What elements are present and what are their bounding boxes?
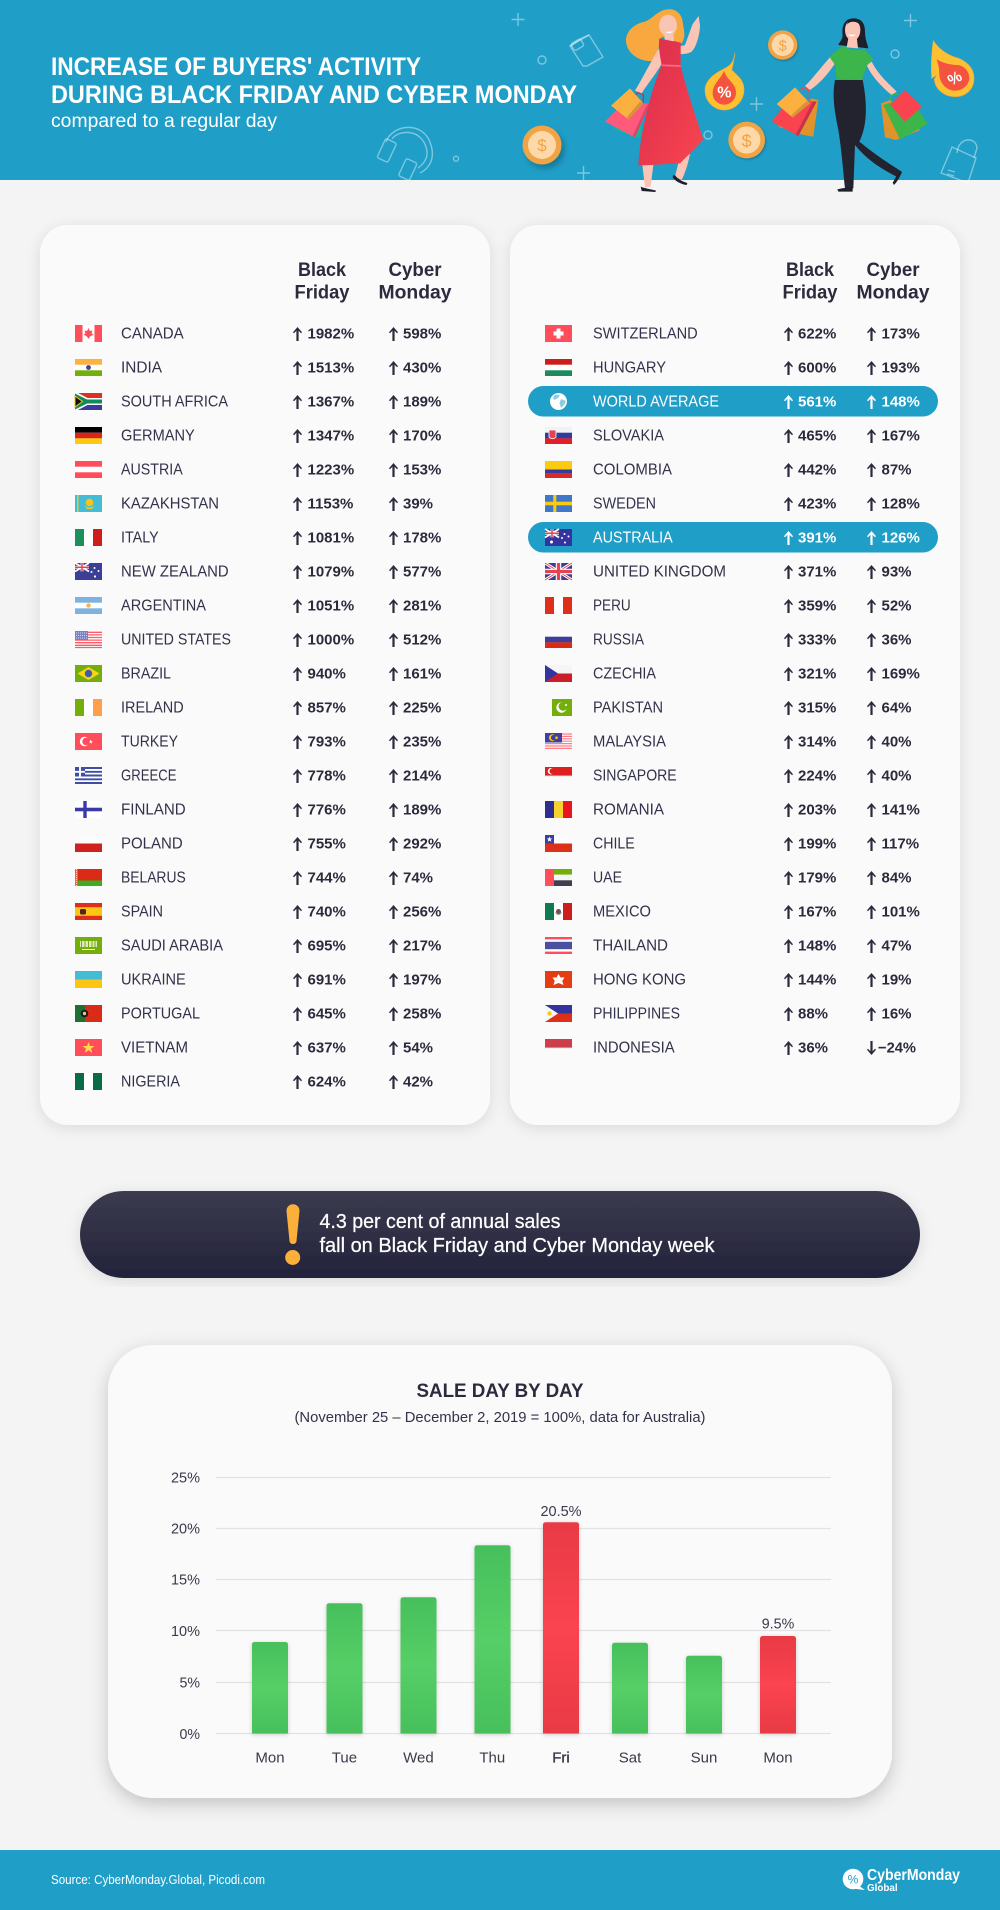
column heading: Black Friday: Friday — [782, 282, 838, 304]
source note: Source: CyberMonday.Global, Picodi.com — [51, 1873, 265, 1887]
flag: Thailand — [545, 937, 572, 954]
flag: Argentina — [75, 597, 102, 614]
row: Austria: AUSTRIA — [121, 462, 183, 478]
row: Canada: 598% — [403, 326, 441, 342]
flag: Germany — [75, 427, 102, 444]
icon: globe — [550, 393, 567, 410]
x axis labels: Wed — [403, 1750, 434, 1766]
flag: Ukraine — [75, 971, 102, 988]
y axis labels: 25% — [171, 1470, 200, 1486]
column heading: Black Friday: Friday — [294, 282, 350, 304]
row: Saudi Arabia: 695% — [308, 938, 346, 954]
row: Australia highlighted: 126% — [882, 530, 920, 546]
flag: Saudi Arabia — [75, 937, 102, 954]
callout text: 4.3 per cent of annual sales — [320, 1211, 560, 1233]
row: Peru: 359% — [798, 598, 836, 614]
column heading: Cyber Monday: Monday — [378, 282, 452, 304]
flag: Finland — [75, 801, 102, 818]
row: Finland — [75, 801, 441, 818]
row: Brazil: 161% — [403, 666, 441, 682]
column heading: Cyber Monday: Cyber — [866, 260, 920, 281]
logo: CyberMonday Global: % — [848, 1872, 859, 1886]
row: South Africa: 189% — [403, 394, 441, 410]
x axis labels: Mon — [763, 1750, 793, 1766]
row: Czechia: 169% — [882, 666, 920, 682]
row: Slovakia: SLOVAKIA — [593, 428, 664, 444]
row: Poland: 292% — [403, 836, 441, 852]
flag: Chile — [545, 835, 572, 852]
icon: coin bottom — [728, 122, 765, 158]
flag: Spain — [75, 903, 102, 920]
row: Turkey — [75, 733, 441, 750]
row: Argentina: ARGENTINA — [121, 598, 206, 614]
flag: Switzerland — [545, 325, 572, 342]
row: Romania: 203% — [798, 802, 836, 818]
row: Italy: 178% — [403, 530, 441, 546]
row: Sweden: 128% — [882, 496, 920, 512]
row: Russia — [545, 631, 912, 648]
flag: Peru — [545, 597, 572, 614]
row: Canada: CANADA — [121, 326, 184, 342]
bar chart — [171, 1470, 831, 1766]
row: Belarus: 74% — [403, 870, 433, 886]
flag: Singapore — [545, 767, 572, 776]
column heading: Black Friday: Black — [786, 260, 834, 281]
flag: Austria — [75, 461, 102, 478]
value labels — [540, 1503, 794, 1632]
row: Spain: 256% — [403, 904, 441, 920]
row: Philippines — [545, 1005, 912, 1022]
callout text: fall on Black Friday and Cyber Monday week — [320, 1235, 715, 1257]
row: Spain: SPAIN — [121, 904, 163, 920]
row: Belarus — [75, 869, 433, 886]
row: United States: 512% — [403, 632, 441, 648]
row: Finland: FINLAND — [121, 802, 186, 818]
row: Peru: 52% — [882, 598, 912, 614]
chart title: SALE DAY BY DAY — [416, 1381, 584, 1402]
row: India: 430% — [403, 360, 441, 376]
row: Nigeria — [75, 1073, 433, 1090]
row: Czechia — [545, 665, 920, 682]
row: Colombia: 87% — [882, 462, 912, 478]
row: Kazakhstan: KAZAKHSTAN — [121, 496, 219, 512]
row: United States: UNITED STATES — [121, 632, 231, 648]
row: Belarus: 744% — [308, 870, 346, 886]
woman in green top — [772, 18, 928, 192]
icon: shopping bag outline — [941, 140, 977, 183]
row: UAE: UAE — [593, 870, 622, 886]
row: India: INDIA — [121, 360, 162, 376]
flag: Colombia — [545, 461, 572, 478]
row: Australia highlighted: 391% — [798, 530, 836, 546]
icon: headphones — [377, 127, 432, 181]
row: Romania: 141% — [882, 802, 920, 818]
icon: coin bottom: $ — [742, 131, 752, 151]
row: Hong Kong — [545, 971, 912, 988]
x axis labels: Mon — [255, 1750, 285, 1766]
row: Saudi Arabia — [75, 937, 441, 954]
flag: UAE — [545, 869, 572, 886]
row: Thailand: THAILAND — [593, 938, 668, 954]
flag: India — [75, 359, 102, 376]
header band — [0, 0, 1000, 180]
row: Portugal: PORTUGAL — [121, 1006, 200, 1022]
y axis labels: 5% — [180, 1674, 200, 1692]
row: Australia highlighted — [528, 522, 938, 552]
row: United Kingdom: UNITED KINGDOM — [593, 564, 726, 580]
y axis labels: 10% — [171, 1623, 200, 1640]
x axis labels — [255, 1750, 793, 1766]
row: Chile: CHILE — [593, 836, 635, 852]
row: Argentina: 1051% — [308, 598, 354, 614]
heading — [51, 53, 577, 132]
x axis labels: Thu — [479, 1750, 505, 1766]
row: Colombia: 442% — [798, 462, 836, 478]
column heading: Black Friday — [782, 260, 838, 304]
row: Colombia: COLOMBIA — [593, 462, 672, 478]
row: Mexico: 167% — [798, 904, 836, 920]
row: Spain: 740% — [308, 904, 346, 920]
row: Chile: 199% — [798, 836, 836, 852]
row: Kazakhstan: 1153% — [308, 496, 353, 512]
row: New Zealand — [75, 563, 441, 580]
row: Hong Kong: 144% — [798, 972, 836, 988]
row: Peru — [545, 597, 912, 614]
row: Ukraine — [75, 971, 441, 988]
row: World average highlighted — [528, 386, 938, 416]
row: India: 1513% — [308, 360, 354, 376]
row: Colombia — [545, 461, 912, 478]
row: Switzerland — [545, 325, 920, 342]
column heading: Cyber Monday: Cyber — [388, 260, 442, 281]
row: Czechia: 321% — [798, 666, 836, 682]
row: Hungary: 600% — [798, 360, 836, 376]
row: Spain — [75, 903, 441, 920]
row: Peru: PERU — [593, 598, 631, 614]
flag: Ireland — [75, 699, 102, 716]
flame badge percent — [705, 53, 744, 110]
flame badge percent: % — [717, 85, 731, 102]
row: Switzerland: SWITZERLAND — [593, 326, 698, 342]
row: New Zealand: 577% — [403, 564, 441, 580]
row: Philippines: 16% — [882, 1006, 912, 1022]
y axis labels: 0% — [180, 1726, 200, 1743]
row: Germany: GERMANY — [121, 428, 195, 444]
row: UAE: 84% — [882, 870, 912, 886]
row: World average highlighted: 561% — [798, 394, 836, 410]
row: Singapore: SINGAPORE — [593, 768, 677, 784]
panel: right ranking — [510, 225, 960, 1125]
column heading: Cyber Monday — [856, 260, 930, 304]
decorative line icons — [377, 13, 977, 183]
value labels: 20.5% — [540, 1503, 582, 1520]
row: Portugal: 258% — [403, 1006, 441, 1022]
row: Poland: POLAND — [121, 836, 183, 852]
row: Austria: 153% — [403, 462, 441, 478]
row: Finland: 776% — [308, 802, 346, 818]
heading: DURING BLACK FRIDAY AND CYBER MONDAY — [51, 81, 577, 109]
row: Ukraine: 691% — [308, 972, 346, 988]
row: Argentina — [75, 597, 441, 614]
row: Sweden: 423% — [798, 496, 836, 512]
panel: left ranking — [40, 225, 490, 1125]
row: Hong Kong: HONG KONG — [593, 972, 686, 988]
flag: Sweden — [545, 495, 572, 512]
flag: Canada — [75, 325, 102, 342]
row: Indonesia: −24% — [878, 1040, 916, 1056]
x axis labels: Sun — [691, 1750, 717, 1766]
flag: Indonesia — [545, 1039, 572, 1048]
flag: Romania — [545, 801, 572, 818]
footer band — [0, 1850, 1000, 1910]
column heading: Cyber Monday: Monday — [856, 282, 930, 304]
row: Singapore — [545, 767, 912, 784]
flag: Malaysia — [545, 733, 572, 749]
row: Poland — [75, 835, 441, 852]
flame badge right: % — [945, 68, 966, 89]
row: Slovakia: 465% — [798, 428, 836, 444]
row: Indonesia: 36% — [798, 1040, 828, 1056]
row: Ireland — [75, 699, 441, 716]
illustration: shoppers — [605, 9, 974, 192]
heading: compared to a regular day — [51, 111, 278, 132]
row: Turkey: 235% — [403, 734, 441, 750]
icon: coin large left — [522, 126, 562, 164]
flag: Italy — [75, 529, 102, 546]
row: World average highlighted: 148% — [882, 394, 920, 410]
row: Mexico: MEXICO — [593, 904, 651, 920]
row: Ireland: 857% — [308, 700, 346, 716]
row: Russia: 36% — [882, 632, 912, 648]
row: Greece: 214% — [403, 768, 441, 784]
row: Germany: 170% — [403, 428, 441, 444]
panel: sale day by day — [108, 1345, 892, 1798]
row: Austria: 1223% — [308, 462, 354, 478]
icon: coin top — [768, 30, 797, 60]
row: Philippines: PHILIPPINES — [593, 1006, 680, 1022]
row: UAE: 179% — [798, 870, 836, 886]
logo: CyberMonday Global — [843, 1867, 960, 1894]
logo: CyberMonday Global: CyberMonday — [867, 1867, 960, 1884]
row: Italy — [75, 529, 441, 546]
row: Ukraine: UKRAINE — [121, 972, 186, 988]
row: India — [75, 359, 441, 376]
flag: Greece — [75, 767, 102, 784]
flag: Nigeria — [75, 1073, 102, 1090]
row: Mexico: 101% — [882, 904, 920, 920]
row: Malaysia: 314% — [798, 734, 836, 750]
row: Russia: RUSSIA — [593, 632, 644, 648]
icon: coin top: $ — [779, 39, 787, 55]
chart subtitle: (November 25 – December 2, 2019 = 100%, data for Australia) — [294, 1410, 706, 1426]
row: Pakistan: PAKISTAN — [593, 700, 663, 716]
row: Switzerland: 622% — [798, 326, 836, 342]
row: Greece: 778% — [308, 768, 346, 784]
row: Brazil: 940% — [308, 666, 346, 682]
row: Pakistan: 64% — [882, 700, 912, 716]
row: Nigeria: 624% — [308, 1074, 346, 1090]
flag: Poland — [75, 835, 102, 852]
heading: INCREASE OF BUYERS' ACTIVITY — [51, 53, 421, 81]
row: Italy: 1081% — [308, 530, 354, 546]
row: Switzerland: 173% — [882, 326, 920, 342]
column heading: Cyber Monday — [378, 260, 452, 304]
flag: Philippines — [545, 1005, 572, 1022]
row: Poland: 755% — [308, 836, 346, 852]
row: Vietnam: 54% — [403, 1040, 433, 1056]
flag: South Africa — [75, 393, 102, 410]
flag: Vietnam — [75, 1039, 102, 1056]
row: South Africa: 1367% — [308, 394, 354, 410]
row: Hong Kong: 19% — [882, 972, 912, 988]
row: Ukraine: 197% — [403, 972, 441, 988]
icon: exclamation mark — [285, 1204, 300, 1265]
flag: Belarus — [75, 869, 102, 886]
flag: Hong Kong — [545, 971, 572, 988]
row: Germany: 1347% — [308, 428, 354, 444]
flag: Kazakhstan — [75, 495, 102, 512]
flag: Portugal — [75, 1005, 102, 1022]
row: Nigeria: 42% — [403, 1074, 433, 1090]
y axis labels: 15% — [171, 1572, 200, 1588]
row: United Kingdom: 93% — [882, 564, 912, 580]
row: South Africa — [75, 393, 441, 410]
row: Canada — [75, 325, 441, 342]
row: Portugal: 645% — [308, 1006, 346, 1022]
row: Malaysia: 40% — [882, 734, 912, 750]
row: Canada: 1982% — [308, 326, 354, 342]
row: Argentina: 281% — [403, 598, 441, 614]
row: Nigeria: NIGERIA — [121, 1074, 180, 1090]
row: Malaysia: MALAYSIA — [593, 734, 666, 750]
row: Ireland: IRELAND — [121, 700, 184, 716]
y axis labels — [171, 1470, 200, 1743]
row: Finland: 189% — [403, 802, 441, 818]
y axis labels: 20% — [171, 1520, 200, 1538]
row: Saudi Arabia: 217% — [403, 938, 441, 954]
row: South Africa: SOUTH AFRICA — [121, 394, 228, 410]
row: Kazakhstan: 39% — [403, 496, 433, 512]
row: Austria — [75, 461, 441, 478]
flag: Czechia — [545, 665, 572, 682]
row: Slovakia: 167% — [882, 428, 920, 444]
row: Indonesia — [545, 1039, 916, 1056]
flag: Mexico — [545, 903, 572, 920]
flag: Brazil — [75, 665, 102, 682]
row: Belarus: BELARUS — [121, 870, 186, 886]
row: Australia highlighted: AUSTRALIA — [593, 530, 673, 546]
row: Thailand — [545, 937, 912, 954]
row: New Zealand: 1079% — [308, 564, 354, 580]
callout: annual sales share — [80, 1191, 920, 1278]
flame badge right — [931, 41, 974, 97]
callout text — [320, 1211, 715, 1257]
row: Turkey: TURKEY — [121, 734, 178, 750]
row: Germany — [75, 427, 441, 444]
row: Hungary: HUNGARY — [593, 360, 666, 376]
row: Portugal — [75, 1005, 441, 1022]
row: Brazil: BRAZIL — [121, 666, 171, 682]
row: Pakistan — [552, 699, 912, 716]
row: Thailand: 148% — [798, 938, 836, 954]
row: United Kingdom — [545, 563, 912, 580]
logo: CyberMonday Global: Global — [867, 1883, 898, 1894]
value labels: 9.5% — [762, 1616, 794, 1632]
woman in red dress — [605, 9, 703, 192]
icon: coin large left: $ — [537, 136, 547, 155]
flag: Turkey — [75, 733, 102, 750]
row: Thailand: 47% — [882, 938, 912, 954]
row: Vietnam: VIETNAM — [121, 1040, 188, 1056]
x axis labels: Sat — [619, 1750, 642, 1766]
column heading: Black Friday — [294, 260, 350, 304]
row: Russia: 333% — [798, 632, 836, 648]
row: Sweden: SWEDEN — [593, 496, 656, 512]
row: Hungary: 193% — [882, 360, 920, 376]
row: Czechia: CZECHIA — [593, 666, 656, 682]
row: Hungary — [545, 359, 920, 376]
row: Brazil — [75, 665, 441, 682]
row: World average highlighted: WORLD AVERAGE — [593, 394, 719, 410]
flag: Hungary — [545, 359, 572, 376]
row: United States — [75, 631, 441, 648]
row: United States: 1000% — [308, 632, 354, 648]
x axis labels: Tue — [332, 1750, 357, 1766]
flag: Australia — [545, 529, 572, 546]
row: New Zealand: NEW ZEALAND — [121, 564, 229, 580]
flag: United States — [75, 631, 102, 648]
row: Mexico — [545, 903, 920, 920]
row: Vietnam — [75, 1039, 433, 1056]
row: Greece: GREECE — [121, 768, 176, 784]
row: Slovakia — [545, 427, 920, 444]
bars — [252, 1522, 796, 1734]
x axis labels: Fri — [552, 1750, 570, 1766]
row: Singapore: 224% — [798, 768, 836, 784]
icon: wallet — [570, 35, 603, 66]
row: Pakistan: 315% — [798, 700, 836, 716]
flag: Slovakia — [545, 427, 572, 444]
row: Romania: ROMANIA — [593, 802, 664, 818]
row: UAE — [545, 869, 912, 886]
row: Italy: ITALY — [121, 530, 159, 546]
row: Romania — [545, 801, 920, 818]
row: Indonesia: INDONESIA — [593, 1040, 675, 1056]
row: Chile: 117% — [882, 836, 919, 852]
column heading: Black Friday: Black — [298, 260, 346, 281]
row: Malaysia — [545, 733, 912, 750]
flag: Pakistan — [552, 699, 572, 716]
row: Sweden — [545, 495, 920, 512]
row: Greece — [75, 767, 441, 784]
row: Kazakhstan — [75, 495, 433, 512]
row: United Kingdom: 371% — [798, 564, 836, 580]
row: Vietnam: 637% — [308, 1040, 346, 1056]
row: Turkey: 793% — [308, 734, 346, 750]
flag: Russia — [545, 631, 572, 648]
row: Saudi Arabia: SAUDI ARABIA — [121, 938, 223, 954]
row: Singapore: 40% — [882, 768, 912, 784]
row: Chile — [545, 835, 919, 852]
row: Philippines: 88% — [798, 1006, 828, 1022]
flag: United Kingdom — [545, 563, 572, 580]
row: Ireland: 225% — [403, 700, 441, 716]
flag: New Zealand — [75, 563, 102, 580]
